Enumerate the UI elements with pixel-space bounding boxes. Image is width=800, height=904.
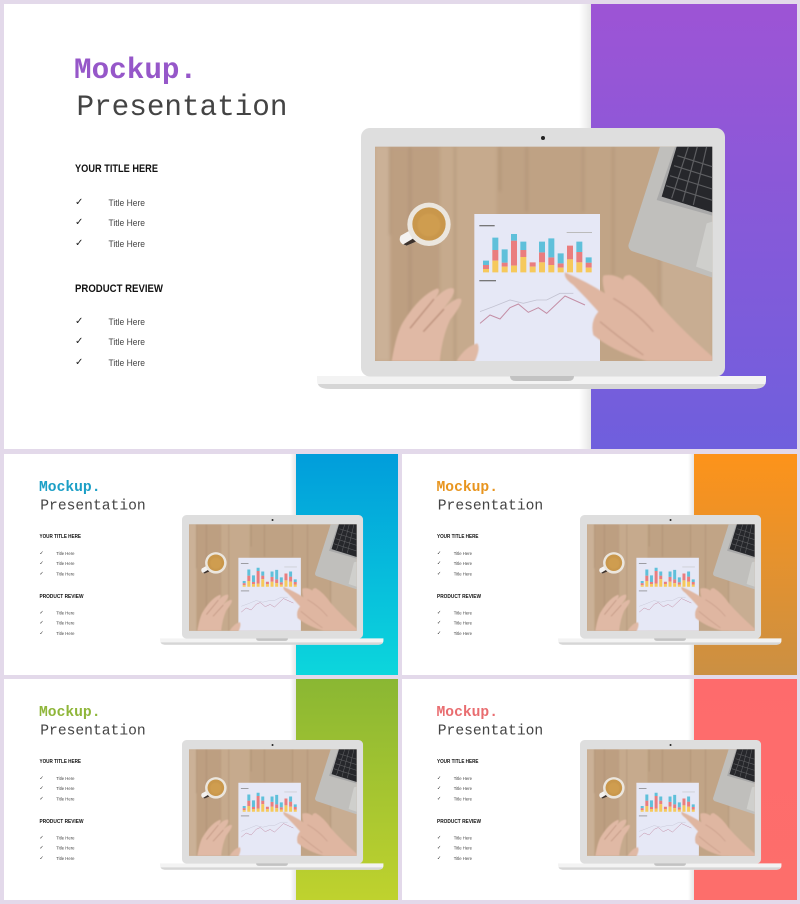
list: product review: ✓: [75, 336, 83, 347]
slide text: ✓: [40, 630, 44, 636]
list: product review: ✓: [75, 357, 83, 368]
title block: [74, 54, 287, 124]
slide text: Presentation: [438, 724, 543, 740]
title block: Presentation: [76, 91, 287, 124]
slide text: Title Here: [454, 572, 472, 578]
slide text: Presentation: [40, 724, 146, 740]
slide text: ✓: [437, 571, 441, 577]
slide text: Title Here: [56, 631, 75, 637]
band shadow: [688, 454, 694, 675]
slide text: Title Here: [454, 836, 472, 842]
colour band: green: [296, 679, 398, 900]
slide text: ✓: [40, 610, 44, 616]
slide text: ✓: [40, 856, 44, 862]
list: your title here: Title Here: [108, 198, 145, 209]
slide text: Title Here: [56, 846, 75, 852]
list: product review: Title Here: [108, 358, 145, 369]
list: product review: Title Here: [108, 317, 145, 328]
panel: blue slide: [4, 454, 398, 675]
slide text: ✓: [437, 856, 441, 862]
slide text: YOUR TITLE HERE: [437, 534, 479, 540]
slide text: ✓: [40, 786, 44, 792]
slide text: YOUR TITLE HERE: [437, 759, 479, 765]
list: your title here: ✓: [75, 197, 83, 208]
slide text: ✓: [40, 550, 44, 556]
slide text: Title Here: [454, 776, 472, 782]
slide text: Presentation: [438, 498, 543, 514]
slide text: Title Here: [454, 796, 472, 802]
laptop mockup: [558, 740, 781, 870]
slide text: ✓: [437, 620, 441, 626]
slide text: ✓: [40, 571, 44, 577]
slide text: ✓: [437, 776, 441, 782]
list: product review: [75, 283, 164, 369]
slide text: ✓: [437, 550, 441, 556]
slide text: ✓: [437, 786, 441, 792]
slide text: Title Here: [56, 620, 75, 626]
slide text: Title Here: [56, 836, 75, 842]
slide text: Presentation: [40, 498, 146, 514]
slide text: Title Here: [454, 551, 472, 557]
slide text: ✓: [437, 560, 441, 566]
slide text: ✓: [40, 776, 44, 782]
slide text: PRODUCT REVIEW: [437, 819, 482, 825]
slide text: Title Here: [56, 610, 75, 616]
panel: main purple slide: [4, 4, 797, 449]
title block: Mockup.: [74, 54, 197, 87]
slide text: Title Here: [454, 846, 472, 852]
slide text: ✓: [40, 845, 44, 851]
laptop mockup: [160, 515, 383, 645]
list: product review: Title Here: [108, 337, 145, 348]
slide text: Mockup.: [39, 480, 101, 496]
colour band: red: [694, 679, 797, 900]
slide text: Title Here: [454, 631, 472, 637]
slide text: ✓: [437, 610, 441, 616]
panel: red slide: [402, 679, 797, 900]
slide text: PRODUCT REVIEW: [40, 819, 84, 825]
list: your title here: ✓: [75, 238, 83, 249]
slide text: ✓: [437, 835, 441, 841]
list: your title here: ✓: [75, 217, 83, 228]
slide text: ✓: [437, 630, 441, 636]
panel: green slide: [4, 679, 398, 900]
colour band: orange: [694, 454, 797, 675]
list: your title here: [75, 163, 158, 250]
slide text: Mockup.: [39, 705, 101, 721]
band shadow: [579, 4, 591, 449]
slide text: Title Here: [454, 561, 472, 567]
colour band: purple: [591, 4, 797, 449]
list: your title here: YOUR TITLE HERE: [75, 163, 158, 175]
slide text: Mockup.: [436, 480, 498, 496]
slide text: Title Here: [454, 620, 472, 626]
slide text: Title Here: [56, 776, 75, 782]
slide text: YOUR TITLE HERE: [40, 534, 81, 540]
slide text: PRODUCT REVIEW: [40, 594, 84, 600]
list: product review: ✓: [75, 316, 83, 327]
slide text: Title Here: [454, 856, 472, 862]
slide text: ✓: [40, 620, 44, 626]
slide text: Title Here: [56, 786, 75, 792]
slide text: ✓: [437, 845, 441, 851]
list: your title here: Title Here: [108, 239, 145, 250]
slide text: Title Here: [454, 786, 472, 792]
band shadow: [290, 679, 296, 900]
band shadow: [688, 679, 694, 900]
slide text: [436, 480, 543, 637]
slide text: PRODUCT REVIEW: [437, 594, 482, 600]
slide text: [39, 480, 146, 637]
slide text: ✓: [40, 796, 44, 802]
slide text: Title Here: [56, 796, 75, 802]
slide text: YOUR TITLE HERE: [40, 759, 81, 765]
list: product review: PRODUCT REVIEW: [75, 283, 164, 295]
slide text: Mockup.: [436, 705, 498, 721]
slide text: ✓: [437, 796, 441, 802]
slide text: Title Here: [56, 572, 75, 578]
slide text: Title Here: [454, 610, 472, 616]
laptop mockup: [558, 515, 781, 645]
slide text: Title Here: [56, 551, 75, 557]
slide text: Title Here: [56, 856, 75, 862]
laptop mockup: [160, 740, 383, 870]
band shadow: [290, 454, 296, 675]
panel: orange slide: [402, 454, 797, 675]
slide text: [436, 705, 543, 862]
colour band: blue: [296, 454, 398, 675]
slide text: ✓: [40, 560, 44, 566]
laptop mockup: [317, 128, 766, 389]
list: your title here: Title Here: [108, 218, 145, 229]
slide text: Title Here: [56, 561, 75, 567]
slide text: ✓: [40, 835, 44, 841]
slide text: [39, 705, 146, 862]
